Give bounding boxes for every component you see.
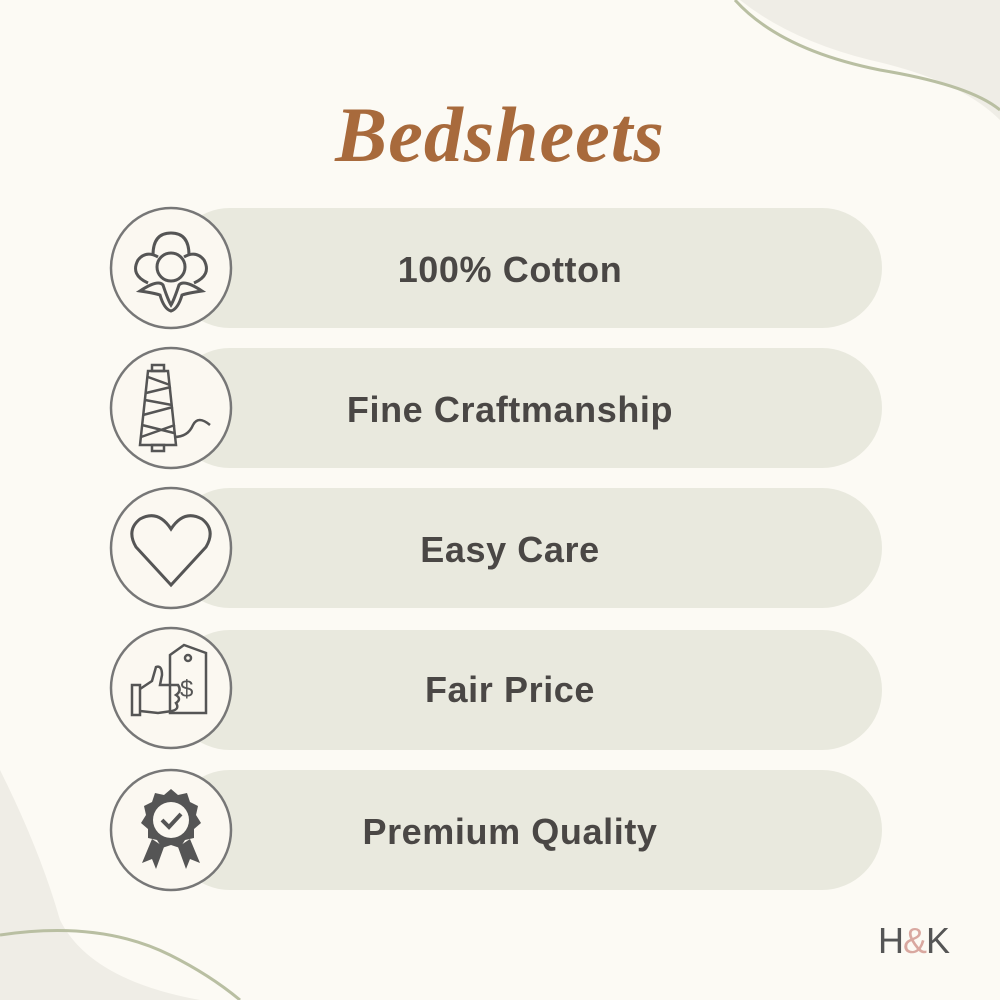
logo: H&K: [878, 920, 949, 961]
icon: thumbs up price tag: [110, 626, 232, 750]
icon: thumbs up price tag: $: [180, 676, 193, 703]
row: fair price: Fair Price: [425, 669, 595, 710]
title: Bedsheets: [335, 91, 665, 178]
icon: heart: [110, 486, 232, 610]
row: premium: Premium Quality: [362, 811, 658, 852]
icon: cotton: [110, 206, 232, 330]
row: cotton: 100% Cotton: [398, 249, 622, 290]
row: craftsmanship: Fine Craftmanship: [347, 389, 673, 430]
icon: thread spool: [110, 346, 232, 470]
row: easy care: Easy Care: [420, 529, 600, 570]
icon: badge: [110, 768, 232, 892]
